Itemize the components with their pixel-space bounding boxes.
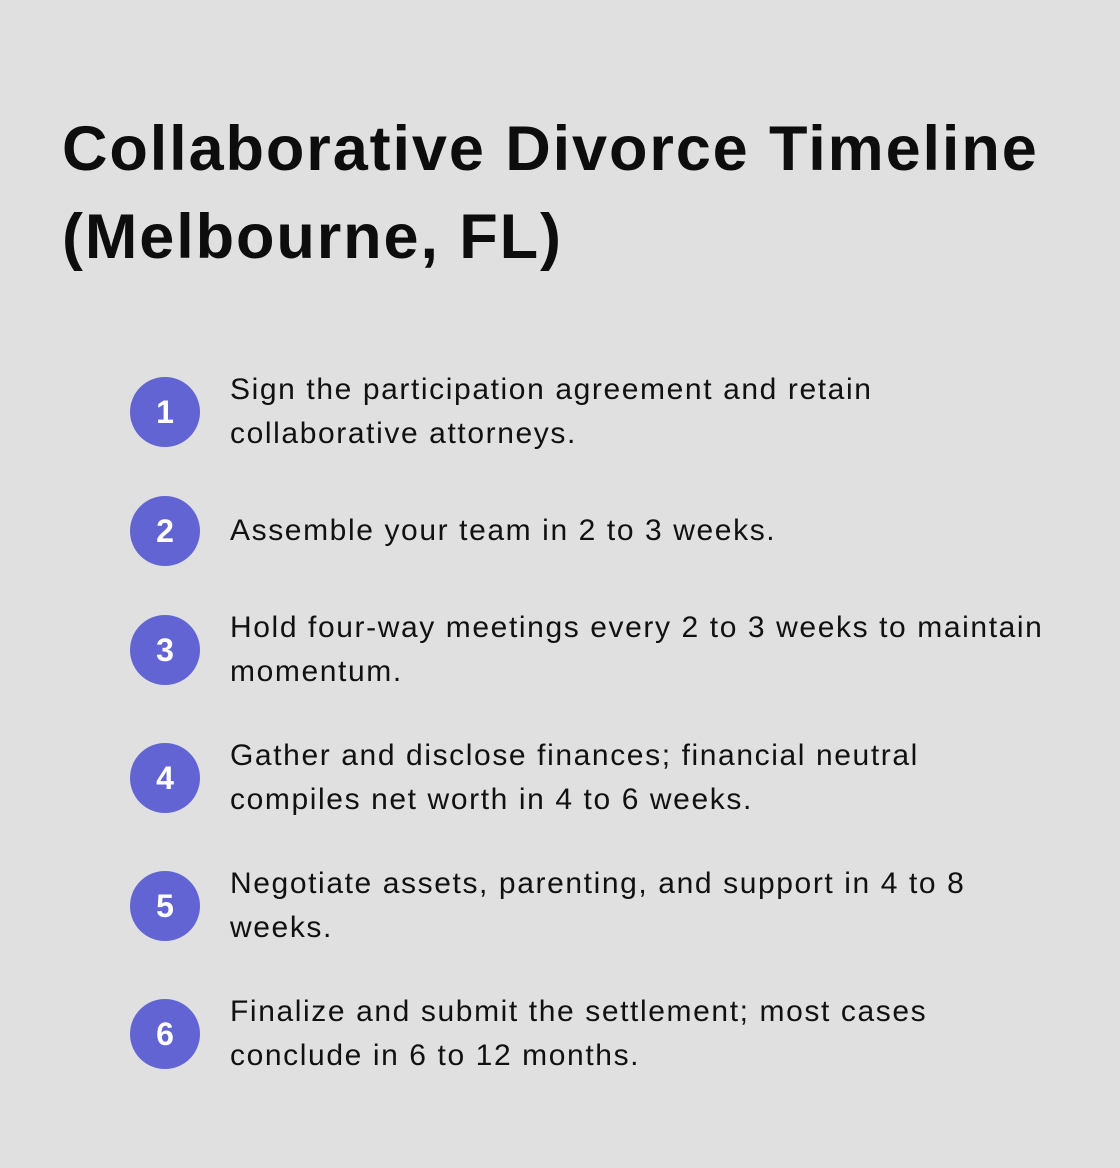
step 1 — [130, 373, 873, 450]
step 3: 3 — [156, 632, 174, 668]
step 6: Finalize and submit the settlement; most cases — [230, 995, 927, 1028]
step 6 — [130, 995, 927, 1072]
step 1: collaborative attorneys. — [230, 417, 577, 450]
step 5: 5 — [156, 888, 174, 924]
step 4: Gather and disclose finances; financial neutral — [230, 739, 919, 772]
step 6: conclude in 6 to 12 months. — [230, 1039, 640, 1072]
title: Collaborative Divorce Timeline — [62, 114, 1039, 184]
step 2: 2 — [156, 513, 174, 549]
step 4: compiles net worth in 4 to 6 weeks. — [230, 783, 753, 816]
step 4 — [130, 739, 919, 816]
step 2: Assemble your team in 2 to 3 weeks. — [230, 514, 776, 547]
step 5: weeks. — [230, 911, 333, 944]
title: (Melbourne, FL) — [62, 202, 563, 272]
step 3: Hold four-way meetings every 2 to 3 weeks to maintain — [230, 611, 1043, 644]
step 1: Sign the participation agreement and retain — [230, 373, 873, 406]
step 5: Negotiate assets, parenting, and support in 4 to 8 — [230, 867, 965, 900]
step 5 — [130, 867, 965, 944]
step 4: 4 — [156, 760, 174, 796]
step 3: momentum. — [230, 655, 403, 688]
title — [62, 114, 1039, 272]
step 6: 6 — [156, 1016, 174, 1052]
step 1: 1 — [156, 394, 174, 430]
step 2 — [130, 496, 776, 566]
step 3 — [130, 611, 1043, 688]
